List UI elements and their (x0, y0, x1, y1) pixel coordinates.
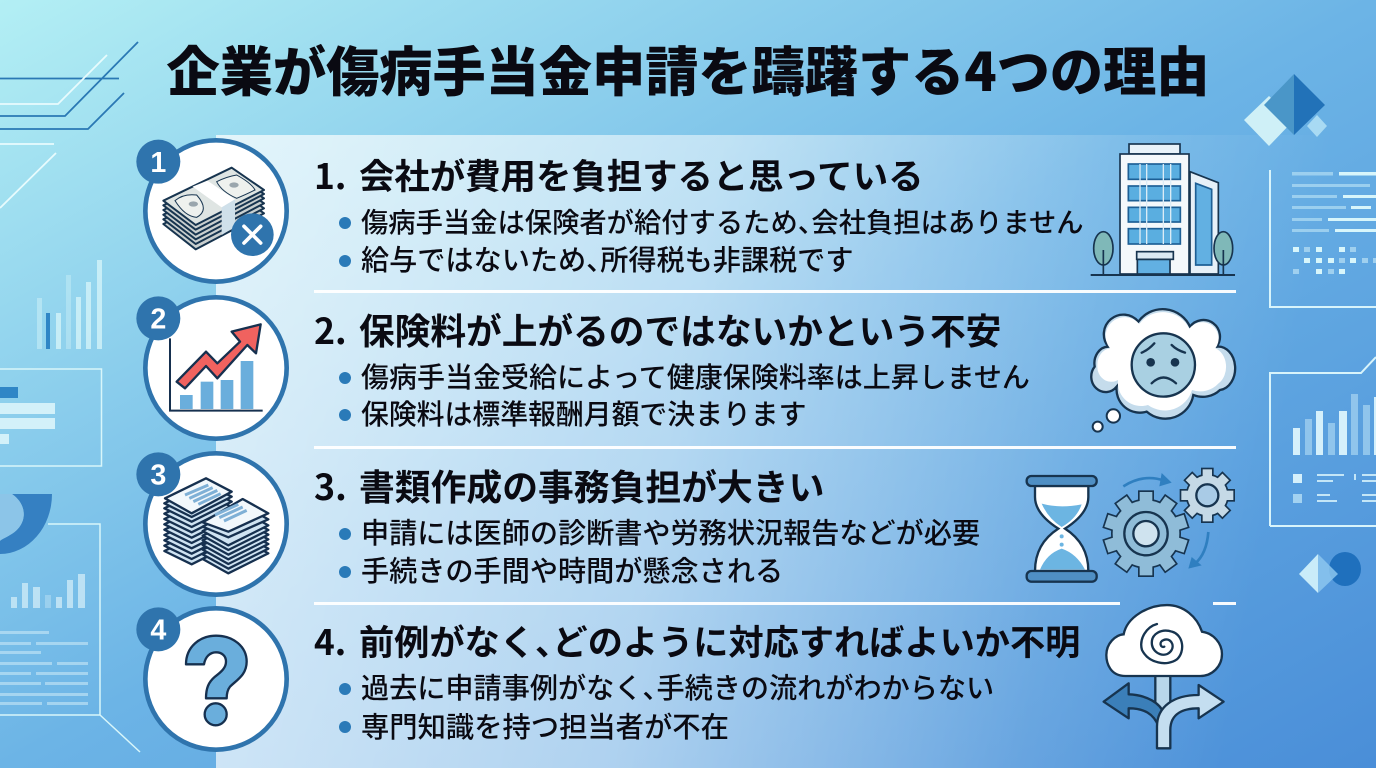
bullet 2-2: 保険料は標準報酬月額で決まります (361, 399, 806, 430)
bullet 2-1: 傷病手当金受給によって健康保険料率は上昇しません (361, 362, 1030, 393)
panel: reason 4 (136, 604, 1225, 752)
badge: number 2: 2 (150, 304, 166, 336)
bullet 3-1: 申請には医師の診断書や労務状況報告などが必要 (361, 518, 980, 549)
badge: number 1: 1 (150, 147, 166, 179)
icon: hourglass and gears (1026, 468, 1235, 583)
panel: reason 1 (136, 138, 1235, 284)
heading 3: 3. (314, 459, 347, 511)
icon: document stacks (136, 451, 289, 597)
heading 3: 書類作成の事務負担が大きい (359, 468, 824, 508)
panel: reason 3 (136, 451, 1235, 597)
icon: worried thought cloud (1090, 308, 1236, 433)
bullet 3-2: 手続きの手間や時間が懸念される (361, 556, 783, 587)
bullet 1-2: 給与ではないため、所得税も非課税です (361, 245, 853, 276)
left decoration (0, 41, 140, 752)
badge: number 4 (136, 607, 180, 651)
right decoration (1244, 74, 1376, 593)
heading 2: 2. (314, 304, 347, 355)
divider (314, 290, 1236, 293)
icon: question mark (136, 606, 289, 752)
heading 1: 会社が費用を負担すると思っている (359, 157, 923, 197)
panel: reason 2 (136, 295, 1236, 441)
icon: confused cloud and forked arrows (1102, 604, 1225, 750)
badge: number 3: 3 (150, 460, 166, 492)
bullet 4-2: 専門知識を持つ担当者が不在 (361, 711, 729, 743)
icon: rising chart (136, 295, 289, 441)
heading 4: 前例がなく、どのように対応すればよいか不明 (359, 624, 1080, 663)
heading 4: 4. (314, 615, 346, 666)
divider (314, 446, 1236, 449)
background panel (216, 135, 1376, 768)
divider end (1213, 602, 1236, 605)
icon: office building (1090, 143, 1235, 276)
title: 企業が傷病手当金申請を躊躇する4つの理由 (166, 30, 1210, 107)
badge: number 2 (136, 296, 180, 340)
badge: number 3 (136, 452, 180, 496)
heading 2: 保険料が上がるのではないかという不安 (359, 312, 1001, 352)
divider (314, 602, 1120, 605)
bullet 1-1: 傷病手当金は保険者が給付するため、会社負担はありません (361, 207, 1084, 238)
badge: number 4: 4 (150, 615, 166, 647)
bullet 4-1: 過去に申請事例がなく、手続きの流れがわからない (361, 673, 994, 704)
badge: number 1 (136, 140, 180, 184)
heading 1: 1. (314, 149, 346, 200)
icon: money stack with cross (136, 138, 289, 284)
